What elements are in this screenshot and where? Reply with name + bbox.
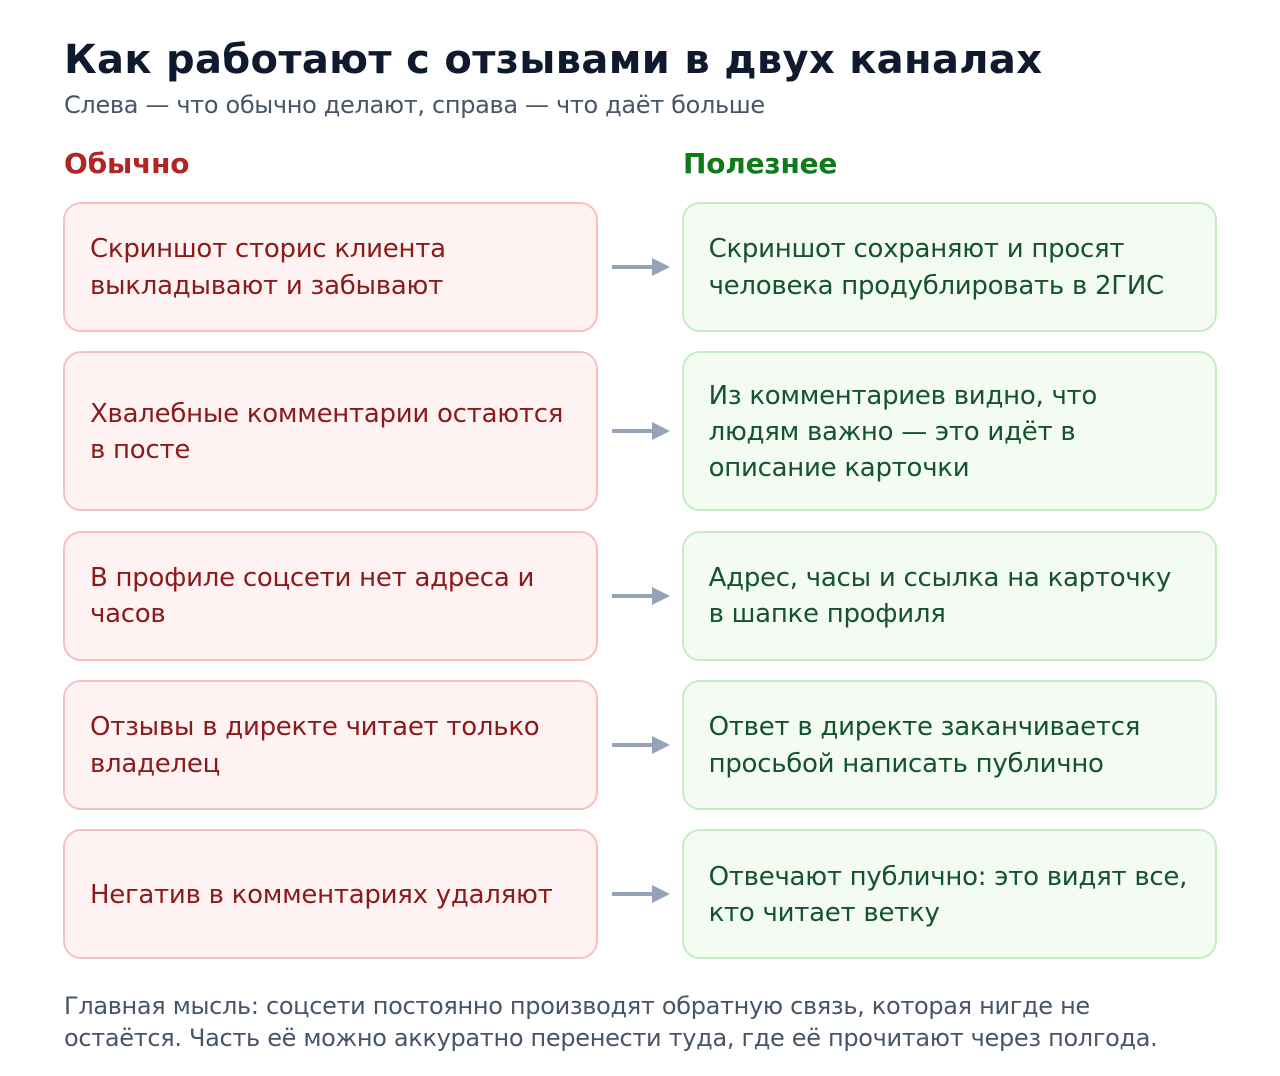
card: useful 3: в шапке профиля bbox=[709, 599, 946, 629]
arrow 4 bbox=[612, 736, 670, 754]
card: usual 1: Скриншот сторис клиента bbox=[90, 234, 446, 264]
arrow 5 bbox=[612, 885, 670, 903]
card: useful 2 bbox=[682, 351, 1217, 511]
card: useful 5 bbox=[682, 829, 1217, 959]
card: useful 5: Отвечают публично: это видят все, bbox=[709, 862, 1187, 892]
heading: usual: Обычно bbox=[64, 147, 189, 180]
card: useful 4: просьбой написать публично bbox=[709, 749, 1104, 779]
title: Как работают с отзывами в двух каналах bbox=[64, 37, 1042, 83]
arrow 1 bbox=[612, 258, 670, 276]
subtitle: Слева — что обычно делают, справа — что даёт больше bbox=[64, 91, 765, 119]
card: usual 2: в посте bbox=[90, 435, 190, 465]
card: usual 5 bbox=[63, 829, 598, 959]
card: useful 4: Ответ в директе заканчивается bbox=[709, 712, 1140, 742]
card: useful 1: человека продублировать в 2ГИС bbox=[709, 271, 1164, 301]
card: useful 5: кто читает ветку bbox=[709, 898, 940, 928]
card: useful 3 bbox=[682, 531, 1217, 661]
heading: more useful: Полезнее bbox=[683, 147, 837, 180]
card: useful 2: Из комментариев видно, что bbox=[709, 381, 1097, 411]
card: useful 1: Скриншот сохраняют и просят bbox=[709, 234, 1124, 264]
card: usual 3: В профиле соцсети нет адреса и bbox=[90, 563, 534, 593]
card: usual 4: владелец bbox=[90, 749, 220, 779]
card: usual 4 bbox=[63, 680, 598, 810]
card: usual 1: выкладывают и забывают bbox=[90, 271, 443, 301]
card: useful 4 bbox=[682, 680, 1217, 810]
card: usual 2 bbox=[63, 351, 598, 511]
card: usual 1 bbox=[63, 202, 598, 332]
footer takeaway: остаётся. Часть её можно аккуратно перенести туда, где её прочитают через полгода. bbox=[64, 1024, 1157, 1052]
card: useful 2: людям важно — это идёт в bbox=[709, 417, 1075, 447]
card: usual 3: часов bbox=[90, 599, 165, 629]
card: usual 2: Хвалебные комментарии остаются bbox=[90, 399, 563, 429]
card: usual 5: Негатив в комментариях удаляют bbox=[90, 880, 552, 910]
footer takeaway bbox=[64, 992, 1157, 1052]
card: usual 3 bbox=[63, 531, 598, 661]
card: useful 1 bbox=[682, 202, 1217, 332]
arrow 2 bbox=[612, 422, 670, 440]
card: useful 3: Адрес, часы и ссылка на карточку bbox=[709, 563, 1171, 593]
arrow 3 bbox=[612, 587, 670, 605]
card: usual 4: Отзывы в директе читает только bbox=[90, 712, 539, 742]
footer takeaway: Главная мысль: соцсети постоянно производят обратную связь, которая нигде не bbox=[64, 992, 1090, 1020]
card: useful 2: описание карточки bbox=[709, 453, 969, 483]
